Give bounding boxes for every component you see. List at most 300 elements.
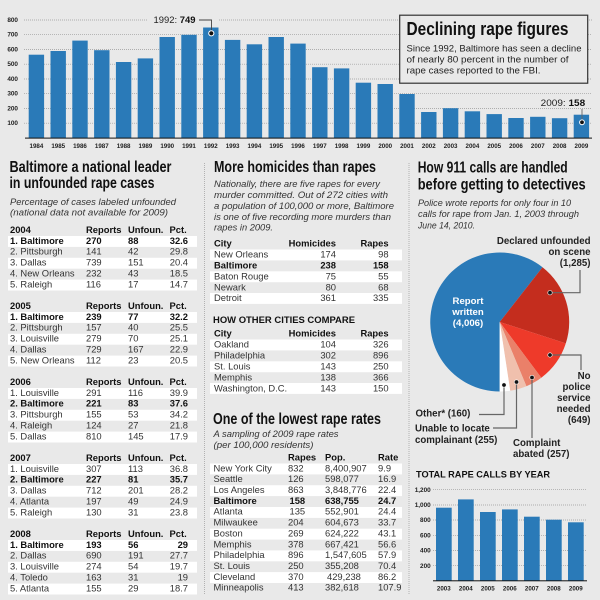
table: 2004: 739 <box>86 256 102 268</box>
callout: declared unfounded: Declared unfounded <box>497 236 591 247</box>
text: unfounded subtitle: Percentage of cases labeled unfounded <box>10 197 177 207</box>
table: rape rates: 667,421 <box>325 538 359 549</box>
table: rape rates <box>210 452 402 593</box>
table: 2008: 29 <box>178 539 188 550</box>
table: rape rates: 107.9 <box>378 582 401 593</box>
callout: other <box>416 383 506 420</box>
table: rape rates: Milwaukee <box>214 517 258 528</box>
table: 2008: 163 <box>86 571 102 582</box>
table: 2008: 19 <box>178 571 188 582</box>
table: 2004: 151 <box>128 256 144 268</box>
table: 2006: Unfoun. <box>128 376 163 387</box>
table: 2005: 239 <box>86 311 102 322</box>
callout: unable to locate complainant <box>415 380 519 446</box>
table: top five cities: 158 <box>373 260 389 270</box>
callout: complaint abated: Complaint <box>513 438 561 449</box>
heading: 911 calls <box>418 160 586 194</box>
table: 2004: 116 <box>86 278 101 289</box>
table: 2008: Reports <box>86 528 121 539</box>
table: rape rates: 1,547,605 <box>325 549 367 560</box>
table: top five cities: Baton Rouge <box>214 270 269 282</box>
table: rape rates: 86.2 <box>378 571 396 582</box>
table: rape rates: 3,848,776 <box>325 484 367 495</box>
table: 2007: 712 <box>86 484 102 496</box>
table: other cities: Philadelphia <box>214 350 266 360</box>
table: 2007: 113 <box>128 463 143 474</box>
panel: declining rape figures box: Since 1992, Baltimore has seen a decline <box>406 43 582 54</box>
table: rape rates: 9.9 <box>378 462 391 473</box>
table: 2006: 2006 <box>10 376 31 387</box>
bar chart: reports by year 1984-2009: 700 <box>7 32 18 39</box>
table: 2006: Reports <box>86 376 121 387</box>
table: 2004: 43 <box>128 267 138 278</box>
table: 2008: 5. Atlanta <box>10 582 50 593</box>
table: 2005: 2. Pittsburgh <box>10 322 63 333</box>
table: 2004: 42 <box>128 246 138 257</box>
bar chart: total rape calls by year: 200 <box>420 563 431 570</box>
bar chart: reports by year 1984-2009: 1998 <box>335 143 349 150</box>
table: other cities: 150 <box>373 382 389 394</box>
table: other cities <box>210 328 402 394</box>
table: 2008: 27.7 <box>170 550 188 561</box>
table: 2007: 227 <box>86 474 102 485</box>
table: 2004: 141 <box>86 246 102 257</box>
heading: lowest rates: One of the lowest rape rates <box>213 411 381 428</box>
callout: declared unfounded: (1,285) <box>560 258 590 269</box>
bar chart: reports by year 1984-2009: 2008 <box>553 143 567 150</box>
table: rape rates: 370 <box>288 571 304 582</box>
table: 2006: 291 <box>86 387 102 398</box>
table: 2008: 54 <box>128 560 138 572</box>
table: 2005: 20.5 <box>170 354 188 365</box>
table: 2006: 17.9 <box>170 430 188 441</box>
text: homicides intro: Nationally, there are five rapes for every <box>214 179 381 189</box>
table: 2005: 729 <box>86 343 102 354</box>
callout: no police service needed <box>548 353 591 426</box>
table: 2004: 2. Pittsburgh <box>10 246 63 257</box>
bar chart: reports by year 1984-2009: 1986 <box>73 143 87 150</box>
bar chart: total rape calls by year: 400 <box>420 548 431 555</box>
table: rape rates: 8,400,907 <box>325 462 367 473</box>
table: 2004: 32.6 <box>170 235 188 246</box>
table: 2007: 197 <box>86 495 102 506</box>
table: top five cities: 98 <box>378 248 389 260</box>
table: 2005: 32.2 <box>170 311 188 322</box>
table: rape rates: Minneapolis <box>214 582 264 593</box>
table: top five cities: Detroit <box>214 292 242 303</box>
bar chart: reports by year 1984-2009: 1995 <box>269 143 284 150</box>
table: 2004: Reports <box>86 224 121 235</box>
bar chart: reports by year 1984-2009: 2002 <box>422 143 436 150</box>
table: 2005 <box>8 300 197 366</box>
table: 2006: 5. Dallas <box>10 430 47 441</box>
callout: no police service needed: No <box>578 371 591 382</box>
table: 2005: 25.5 <box>170 322 188 333</box>
table: 2008: 191 <box>128 550 144 561</box>
table: rape rates: 56.6 <box>378 538 396 549</box>
callout: unable to locate complainant: complainant (255) <box>415 435 497 446</box>
bar chart: reports by year 1984-2009: 1984 <box>30 143 44 150</box>
bar chart: total rape calls by year: 2007 <box>525 586 539 593</box>
callout: 2009 value <box>541 98 585 125</box>
table: 2006: 155 <box>86 408 102 420</box>
table: other cities: Rapes <box>360 328 389 339</box>
table: 2006: 39.9 <box>170 387 188 398</box>
bar chart: reports by year 1984-2009: 2005 <box>487 143 502 150</box>
table: 2007: 5. Raleigh <box>10 506 52 517</box>
bar chart: reports by year 1984-2009: 1987 <box>95 143 109 150</box>
table: top five cities: 68 <box>378 281 389 292</box>
table: rape rates: 269 <box>288 527 304 538</box>
table: 2004: 3. Dallas <box>10 256 47 268</box>
table: rape rates: 429,238 <box>327 571 361 582</box>
callout: no police service needed: police <box>562 382 591 393</box>
table: top five cities: City <box>214 238 232 249</box>
table: 2007: 4. Atlanta <box>10 495 50 506</box>
table: 2008: 18.7 <box>170 582 188 593</box>
table: other cities: Oakland <box>214 338 249 350</box>
panel: Baltimore a national leader <box>8 159 197 594</box>
table: top five cities: Baltimore <box>214 260 257 270</box>
panel: declining rape figures box: rape cases reported to the FBI. <box>406 65 540 76</box>
table: rape rates: 624,222 <box>325 527 359 538</box>
table: 2007: Unfoun. <box>128 452 163 463</box>
table: rape rates: 355,208 <box>325 560 359 571</box>
callout: no police service needed: service <box>557 393 591 404</box>
table: 2006: 810 <box>86 430 102 441</box>
table: 2006: 124 <box>86 419 102 430</box>
table: 2006: 83 <box>128 398 138 409</box>
heading: homicides: More homicides than rapes <box>214 159 376 176</box>
table: 2007: Reports <box>86 452 121 463</box>
heading: national leader: Baltimore a national leader <box>10 159 172 176</box>
table: rape rates: 57.9 <box>378 549 396 560</box>
table: 2006: 53 <box>128 408 138 420</box>
bar chart: reports by year 1984-2009: 1992 <box>204 143 218 150</box>
table: 2004: 232 <box>86 267 102 278</box>
callout: 2009 value: 2009: 158 <box>541 98 585 109</box>
table: other cities: Washington, D.C. <box>214 382 287 394</box>
text: lowest rates subtitle <box>212 429 339 450</box>
table: 2004: 1. Baltimore <box>10 235 64 246</box>
text: 911 intro: Police wrote reports for only four in 10 <box>418 198 572 208</box>
table: top five cities: 335 <box>373 292 389 303</box>
table: 2008: 690 <box>86 550 102 561</box>
text: 911 intro: June 14, 2010. <box>417 220 475 230</box>
table: other cities: 302 <box>320 350 336 360</box>
table: rape rates: 832 <box>288 462 304 473</box>
table: 2006: 145 <box>128 430 144 441</box>
table: rape rates: 378 <box>288 538 304 549</box>
table: rape rates: 24.4 <box>378 506 396 517</box>
bar chart: reports by year 1984-2009: 2003 <box>444 143 458 150</box>
table: other cities: 366 <box>373 372 389 383</box>
table: 2007: 201 <box>128 484 144 496</box>
callout: declared unfounded <box>497 236 591 295</box>
text: report written: written <box>451 307 484 318</box>
table: rape rates: 638,755 <box>325 495 359 506</box>
text: unfounded subtitle <box>10 197 177 218</box>
bar chart: reports by year 1984-2009: 400 <box>7 76 18 83</box>
table: rape rates: 896 <box>288 549 304 560</box>
table: rape rates: Cleveland <box>214 571 255 582</box>
heading: national leader: in unfounded rape cases <box>10 175 155 192</box>
table: 2008: 2. Dallas <box>10 550 47 561</box>
table: other cities: 104 <box>320 338 336 350</box>
table: top five cities: New Orleans <box>214 248 268 260</box>
table: 2004: 29.8 <box>170 246 188 257</box>
table: other cities: 250 <box>373 361 389 372</box>
text: unfounded subtitle: (national data not available for 2009) <box>10 208 168 218</box>
table: 2008 <box>8 528 197 594</box>
callout: complaint abated <box>513 375 570 460</box>
table: rape rates: 22.4 <box>378 484 396 495</box>
table: 2008: 274 <box>86 560 102 572</box>
panel: more homicides than rapes <box>210 159 402 394</box>
bar chart: reports by year 1984-2009: 2009 <box>575 143 589 150</box>
table: 2008: 155 <box>86 582 102 593</box>
table: 2008: 19.7 <box>170 560 188 572</box>
heading: national leader <box>10 159 172 192</box>
table: 2008: 1. Baltimore <box>10 539 64 550</box>
table: 2007 <box>8 452 197 518</box>
table: rape rates: Seattle <box>214 473 243 484</box>
text: report written: Report <box>453 296 484 307</box>
bar chart: total rape calls by year: 2009 <box>569 586 583 593</box>
table: 2005: Reports <box>86 300 121 311</box>
table: rape rates: Los Angeles <box>214 484 265 495</box>
table: 2004: 18.5 <box>170 267 188 278</box>
table: 2008: 4. Toledo <box>10 571 48 582</box>
table: 2008: 31 <box>128 571 138 582</box>
text: report written: (4,006) <box>453 318 483 329</box>
table: other cities: 138 <box>320 372 336 383</box>
callout: unable to locate complainant: Unable to locate <box>415 424 490 435</box>
table: 2007: 36.8 <box>170 463 188 474</box>
table: 2005: 25.1 <box>170 332 188 344</box>
table: 2007: 2. Baltimore <box>10 474 64 485</box>
bar chart: total rape calls by year: 2005 <box>481 586 495 593</box>
table: rape rates: Pop. <box>325 452 345 463</box>
table: other cities: Homicides <box>289 328 336 339</box>
table: rape rates: Philadelphia <box>214 549 265 560</box>
text: homicides intro: murder committed. Out of 272 cities with <box>214 190 388 200</box>
table: 2006 <box>8 376 197 442</box>
table: 2004: Unfoun. <box>128 224 163 235</box>
callout: declared unfounded: on scene <box>548 247 591 258</box>
table: 2005: 40 <box>128 322 138 333</box>
bar chart: total rape calls by year: 2006 <box>503 586 517 593</box>
table: 2006: 1. Louisville <box>10 387 59 398</box>
table: 2007: 49 <box>128 495 138 506</box>
heading: how other cities compare: HOW OTHER CITIES COMPARE <box>213 314 355 325</box>
table: 2007: 23.8 <box>170 506 188 517</box>
table: top five cities: 174 <box>320 248 336 260</box>
table: 2004: 4. New Orleans <box>10 267 75 278</box>
table: 2007: 2007 <box>10 452 31 463</box>
bar chart: reports by year 1984-2009: 2006 <box>509 143 523 150</box>
text: 911 intro: calls for rape from Jan. 1, 2003 through <box>418 209 579 219</box>
panel: how 911 calls are handled <box>415 160 591 593</box>
table: rape rates: 126 <box>288 473 304 484</box>
panel: lowest rape rates <box>210 411 402 593</box>
table: 2007: 1. Louisville <box>10 463 59 474</box>
bar chart: reports by year 1984-2009 <box>7 17 592 150</box>
table: rape rates: 33.7 <box>378 517 396 528</box>
bar chart: reports by year 1984-2009: 1996 <box>291 143 305 150</box>
table: 2008: 29 <box>128 582 138 593</box>
bar chart: reports by year 1984-2009: 2007 <box>531 143 545 150</box>
table: other cities: 143 <box>320 382 336 394</box>
table: rape rates: 16.9 <box>378 473 396 484</box>
table: rape rates: 250 <box>288 560 304 571</box>
callout: 1992 peak: 1992: 749 <box>154 15 196 26</box>
bar chart: reports by year 1984-2009: 1997 <box>313 143 327 150</box>
bar chart: reports by year 1984-2009: 1990 <box>160 143 175 150</box>
bar chart: total rape calls by year: 1,200 <box>415 487 431 494</box>
bar chart: reports by year 1984-2009: 1988 <box>117 143 131 150</box>
bar chart: reports by year 1984-2009: 800 <box>7 17 18 24</box>
bar chart: reports by year 1984-2009: 2000 <box>378 143 393 150</box>
table: rape rates: Rapes <box>288 452 316 463</box>
table: 2008: 3. Louisville <box>10 560 59 572</box>
table: 2004: 88 <box>128 235 138 246</box>
table: 2004: 2004 <box>10 224 32 235</box>
table: 2007: Pct. <box>170 452 187 463</box>
table: 2007: 35.7 <box>170 474 188 485</box>
panel: declining rape figures box: Declining rape figures <box>406 19 568 39</box>
callout: complaint abated: abated (257) <box>513 449 570 460</box>
table: 2008: 193 <box>86 539 102 550</box>
bar chart: reports by year 1984-2009: 300 <box>7 91 18 98</box>
table: rape rates: 204 <box>288 517 304 528</box>
bar chart: reports by year 1984-2009: 1993 <box>226 143 240 150</box>
table: 2007: 130 <box>86 506 102 517</box>
table: 2005: 70 <box>128 332 138 344</box>
table: 2005: 22.9 <box>170 343 188 354</box>
heading: total rape calls: TOTAL RAPE CALLS BY YEAR <box>416 469 550 480</box>
table: 2004: 5. Raleigh <box>10 278 52 289</box>
table: 2006: 34.2 <box>170 408 188 420</box>
table: 2007: 31 <box>128 506 138 517</box>
callout: no police service needed: needed <box>557 404 591 415</box>
table: 2007: 307 <box>86 463 102 474</box>
table: 2004: 20.4 <box>170 256 188 268</box>
bar chart: reports by year 1984-2009: 1985 <box>51 143 66 150</box>
table: rape rates: 382,618 <box>325 582 359 593</box>
table: rape rates: Rate <box>378 452 398 463</box>
bar chart: reports by year 1984-2009: 200 <box>7 106 18 112</box>
bar chart: reports by year 1984-2009: 1991 <box>182 143 196 150</box>
callout: other: Other* (160) <box>416 409 470 420</box>
table: top five cities <box>210 238 402 304</box>
table: other cities: Memphis <box>214 372 252 383</box>
table: 2005: 5. New Orleans <box>10 354 75 365</box>
table: rape rates: 158 <box>290 495 305 506</box>
panel: declining rape figures box <box>400 15 588 83</box>
table: top five cities: Rapes <box>360 238 389 249</box>
table: rape rates: New York City <box>214 462 272 473</box>
table: other cities: 143 <box>320 361 336 372</box>
bar chart: reports by year 1984-2009: 500 <box>7 61 18 68</box>
bar chart: total rape calls by year: 600 <box>420 532 431 539</box>
table: 2008: 56 <box>128 539 138 550</box>
table: 2006: 37.6 <box>170 398 188 409</box>
table: 2008: Pct. <box>170 528 187 539</box>
bar chart: reports by year 1984-2009: 600 <box>7 46 18 54</box>
table: rape rates: 24.7 <box>378 495 396 506</box>
bar chart: reports by year 1984-2009: 2001 <box>400 143 414 150</box>
table: top five cities: 238 <box>320 260 336 270</box>
pie chart: call outcomes <box>430 253 569 392</box>
table: 2005: Pct. <box>170 300 187 311</box>
table: rape rates: 413 <box>288 582 304 593</box>
table: top five cities: 75 <box>326 270 336 282</box>
table: 2005: Unfoun. <box>128 300 163 311</box>
bar chart: total rape calls by year: 2004 <box>459 586 473 593</box>
table: 2004: 14.7 <box>170 278 188 289</box>
bar chart: total rape calls by year: 2008 <box>547 586 561 593</box>
table: 2007: 81 <box>128 474 138 485</box>
bar chart: total rape calls by year: 800 <box>420 517 431 524</box>
text: homicides intro <box>214 179 394 233</box>
table: 2007: 28.2 <box>170 484 188 496</box>
table: 2006: 221 <box>86 398 102 409</box>
table: 2006: 4. Raleigh <box>10 419 52 430</box>
table: rape rates: 598,077 <box>325 473 359 484</box>
table: 2006: 21.8 <box>170 419 188 430</box>
table: rape rates: Boston <box>214 527 243 538</box>
table: 2005: 23 <box>128 354 138 365</box>
table: other cities: 896 <box>373 350 389 360</box>
table: rape rates: 863 <box>288 484 304 495</box>
table: top five cities: 80 <box>326 281 336 292</box>
callout: no police service needed: (649) <box>568 415 590 426</box>
table: 2006: 2. Baltimore <box>10 398 64 409</box>
table: rape rates: Baltimore <box>214 495 257 506</box>
table: 2005: 3. Louisville <box>10 332 59 344</box>
table: 2005: 157 <box>86 322 102 333</box>
table: 2008: Unfoun. <box>128 528 163 539</box>
table: 2005: 2005 <box>10 300 31 311</box>
table: 2004 <box>8 224 197 290</box>
table: 2008: 2008 <box>10 528 31 539</box>
table: 2006: 27 <box>128 419 138 430</box>
bar chart: total rape calls by year: 2003 <box>437 586 451 593</box>
table: rape rates: 135 <box>290 506 305 517</box>
table: top five cities: 361 <box>320 292 336 303</box>
text: homicides intro: a population of 100,000 or more, Baltimore <box>214 201 394 211</box>
bar chart: total rape calls by year <box>415 487 587 593</box>
table: 2005: 279 <box>86 332 102 344</box>
table: 2004: 270 <box>86 235 102 246</box>
panel: declining rape figures box: of nearly 80 percent in the number of <box>406 54 569 65</box>
table: other cities: 326 <box>373 338 389 350</box>
callout: 1992 peak <box>154 15 214 36</box>
table: top five cities: Newark <box>214 281 246 292</box>
table: 2006: 116 <box>128 387 143 398</box>
table: 2005: 112 <box>86 354 101 365</box>
table: rape rates: 604,673 <box>325 517 359 528</box>
text: 911 intro <box>417 198 579 230</box>
table: rape rates: 70.4 <box>378 560 396 571</box>
text: homicides intro: is one of five recording more murders than <box>214 212 391 222</box>
table: 2005: 4. Dallas <box>10 343 47 354</box>
table: 2006: Pct. <box>170 376 187 387</box>
table: 2007: 24.9 <box>170 495 188 506</box>
table: rape rates: 552,901 <box>325 506 359 517</box>
table: rape rates: St. Louis <box>214 560 250 571</box>
